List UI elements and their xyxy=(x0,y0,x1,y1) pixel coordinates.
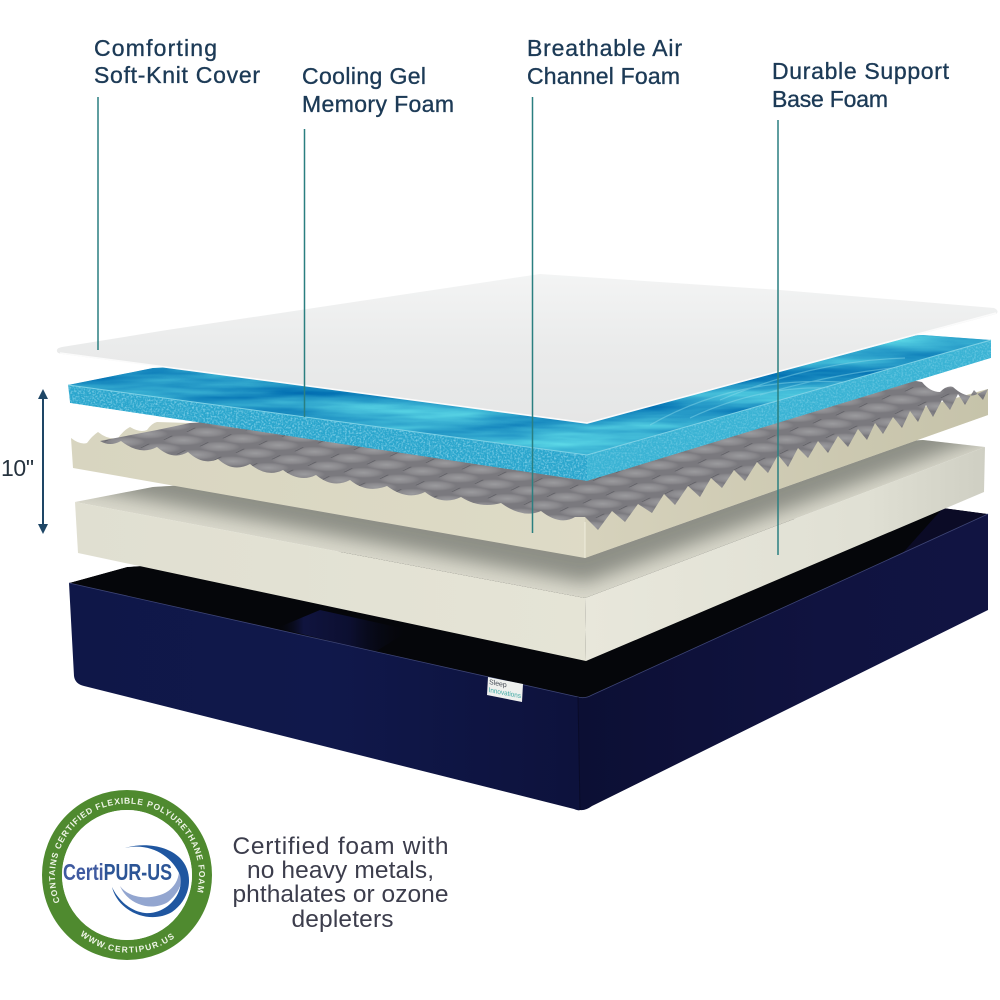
layer: comforting soft-knit cover xyxy=(57,274,998,423)
foam front face xyxy=(75,502,586,661)
brand tag: Sleep xyxy=(489,679,507,689)
callout line: support base xyxy=(777,120,779,555)
foam top face xyxy=(75,440,985,598)
heading: cover label: Soft-Knit Cover xyxy=(94,62,260,88)
gel front face xyxy=(68,386,587,481)
heading: support base label: Durable Support xyxy=(772,58,950,84)
dimension arrow: height xyxy=(38,389,48,534)
layer: cooling gel memory foam xyxy=(60,330,1000,485)
text block: certification note: Certified foam with xyxy=(232,833,448,860)
swoosh light xyxy=(120,860,183,907)
heading: support base label: Base Foam xyxy=(772,86,888,112)
box front side xyxy=(69,583,580,810)
box interior xyxy=(69,508,988,699)
swoosh dark xyxy=(112,845,189,917)
brand tag xyxy=(487,677,523,702)
logo wordmark: CertiPUR-US xyxy=(63,859,172,885)
dimension label: 10 inches: 10" xyxy=(1,455,34,481)
badge: CertiPUR-US seal xyxy=(42,790,212,960)
brand tag: Innovations xyxy=(488,687,522,700)
ring text bottom: WWW.CERTIPUR.US xyxy=(81,930,174,953)
text block: certification note: no heavy metals, xyxy=(247,857,434,884)
heading: air channel label: Channel Foam xyxy=(527,63,680,89)
gel top face xyxy=(60,330,1000,460)
text block: certification note: phthalates or ozone xyxy=(232,881,448,908)
callout line: air channel xyxy=(532,97,534,533)
foam right face xyxy=(585,447,985,661)
heading: cover label: Comforting xyxy=(94,35,217,61)
heading: gel label: Memory Foam xyxy=(302,91,454,117)
layer: navy mattress cover base box xyxy=(69,508,988,810)
layer: durable support base foam xyxy=(75,440,985,661)
callout line: gel xyxy=(304,129,306,417)
cream foam body xyxy=(71,389,988,558)
layer: breathable air channel foam xyxy=(71,378,988,558)
ring text top: CONTAINS CERTIFIED FLEXIBLE POLYURETHANE FOAM xyxy=(49,798,205,903)
gel right face xyxy=(585,335,995,485)
grey convoluted surface xyxy=(100,378,988,530)
heading: gel label: Cooling Gel xyxy=(302,63,426,89)
text block: certification note: depleters xyxy=(292,906,394,933)
callout line: cover xyxy=(97,97,99,350)
box right side xyxy=(578,514,988,810)
cover sheet xyxy=(57,274,998,423)
heading: air channel label: Breathable Air xyxy=(527,35,682,61)
